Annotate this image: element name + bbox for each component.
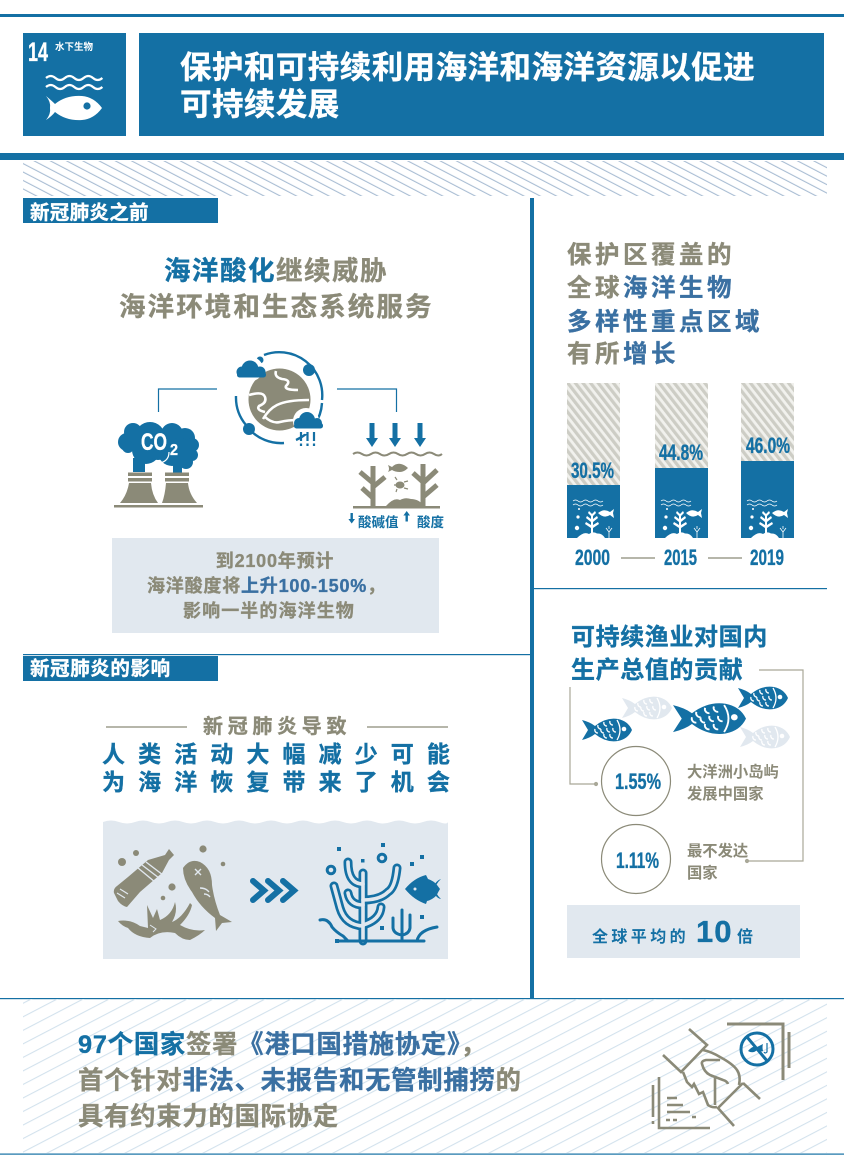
icon: CO2 factory bbox=[114, 422, 203, 508]
stat: LDC: 国家 bbox=[687, 864, 718, 882]
title banner bbox=[139, 33, 824, 136]
heading: COVID effect bbox=[102, 715, 463, 795]
callout: 2100 forecast bbox=[112, 538, 439, 633]
bar: 2015 bbox=[655, 383, 708, 570]
icon: healthy coral bbox=[320, 854, 437, 941]
text: agreement: 具有约束力的国际协定 bbox=[78, 1103, 339, 1131]
stat: LDC: 最不发达 bbox=[687, 842, 748, 860]
bar: 2000 bbox=[567, 383, 620, 570]
bar: 2000: 30.5% bbox=[571, 458, 614, 483]
title banner: 可持续发展 bbox=[180, 86, 340, 122]
callout: 10 times: 10 bbox=[696, 914, 732, 949]
panel: ocean recovery bbox=[103, 820, 448, 959]
icon: chevrons bbox=[253, 881, 294, 900]
stat: LDC bbox=[602, 824, 748, 894]
callout: 10 times bbox=[567, 905, 800, 958]
icon: SDG 14 badge: 水下生物 bbox=[55, 41, 94, 53]
section tag: before COVID bbox=[23, 198, 218, 224]
bar: 2019: 2019 bbox=[750, 545, 784, 570]
title banner: 保护和可持续利用海洋和海洋资源以促进 bbox=[180, 49, 755, 85]
heading: ocean acidification: 海洋环境和生态系统服务 bbox=[119, 292, 434, 322]
acidity labels: 酸度 bbox=[417, 514, 444, 530]
text: agreement bbox=[78, 1031, 522, 1131]
icon: fish school bbox=[582, 687, 790, 748]
heading: COVID effect: 人类活动大幅减少可能 bbox=[102, 741, 463, 767]
callout: 10 times: 全球平均的 bbox=[592, 927, 689, 946]
section tag: COVID impact: 新冠肺炎的影响 bbox=[30, 658, 171, 680]
acidity labels bbox=[348, 511, 444, 530]
stat: SIDS: 1.55% bbox=[615, 769, 661, 794]
icon: handshake and agreement bbox=[653, 1024, 789, 1128]
heading: COVID effect: 为海洋恢复带来了机会 bbox=[102, 769, 463, 795]
icon: ocean acidification bbox=[353, 423, 442, 508]
acidity labels: 酸碱值 bbox=[358, 515, 399, 530]
bar: 2019: 46.0% bbox=[746, 433, 790, 458]
heading: fisheries: 可持续渔业对国内 bbox=[571, 624, 768, 651]
section tag: COVID impact bbox=[23, 656, 218, 681]
connector lines bbox=[158, 389, 396, 412]
heading: protected areas: 全球海洋生物 bbox=[567, 274, 735, 302]
top rule bbox=[0, 14, 844, 17]
bar chart: coverage bbox=[567, 383, 794, 570]
callout: 2100 forecast: 影响一半的海洋生物 bbox=[183, 601, 355, 621]
heading: ocean acidification bbox=[119, 256, 434, 322]
divider rules bbox=[23, 654, 530, 655]
text: agreement: 97个国家签署《港口国措施协定》， bbox=[78, 1031, 487, 1059]
heading: protected areas: 有所增长 bbox=[567, 340, 679, 368]
heading: COVID effect: 新冠肺炎导致 bbox=[203, 715, 351, 738]
stat: SIDS: 发展中国家 bbox=[687, 785, 764, 803]
section tag: before COVID: 新冠肺炎之前 bbox=[30, 201, 149, 224]
icon: SDG 14 badge bbox=[23, 33, 126, 136]
stat: SIDS: 大洋洲小岛屿 bbox=[687, 763, 779, 781]
callout: 2100 forecast: 海洋酸度将上升100-150%， bbox=[147, 576, 386, 596]
stat: SIDS bbox=[602, 746, 779, 816]
icon: polluted ocean bbox=[114, 845, 232, 940]
stat: LDC: 1.11% bbox=[616, 848, 659, 873]
bar: 2015: 2015 bbox=[664, 545, 697, 570]
bar: 2000: 2000 bbox=[575, 545, 610, 570]
icon: CO2 factory: CO bbox=[141, 429, 167, 456]
panel: port state agreement bbox=[0, 998, 844, 1155]
heading: fisheries bbox=[571, 624, 768, 684]
callout: 10 times: 倍 bbox=[737, 927, 753, 946]
icon: no fishing bbox=[741, 1033, 773, 1065]
icon: globe with clouds bbox=[236, 352, 323, 446]
thick rule bbox=[0, 153, 844, 160]
bar: 2015: 44.8% bbox=[659, 440, 703, 465]
callout: 2100 forecast: 到2100年预计 bbox=[216, 550, 334, 571]
text: agreement: 首个针对非法、未报告和无管制捕捞的 bbox=[78, 1067, 522, 1095]
heading: protected areas: 保护区覆盖的 bbox=[567, 241, 735, 269]
heading: protected areas: 多样性重点区域 bbox=[567, 308, 763, 336]
heading: ocean acidification: 海洋酸化继续威胁 bbox=[164, 256, 388, 286]
icon: CO2 factory: 2 bbox=[170, 442, 178, 459]
heading: protected areas bbox=[567, 241, 763, 368]
heading: fisheries: 生产总值的贡献 bbox=[571, 657, 743, 684]
bar: 2019 bbox=[741, 383, 794, 570]
icon: SDG 14 badge: 14 bbox=[28, 37, 48, 67]
connector lines: fisheries bbox=[570, 670, 803, 862]
